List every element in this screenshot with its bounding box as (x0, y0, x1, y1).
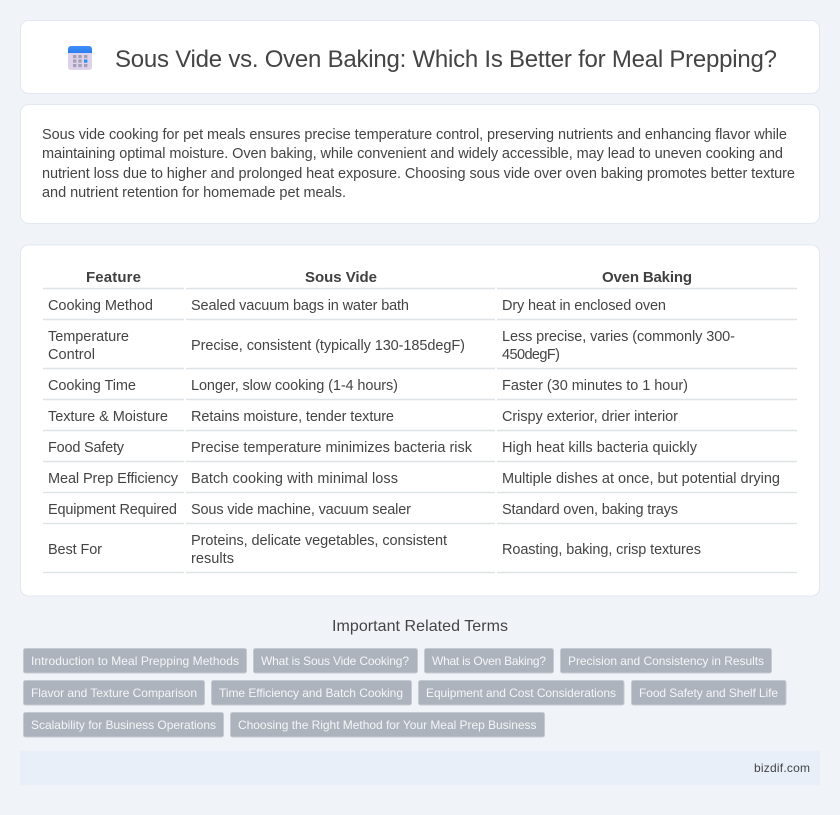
row: texture and moisture: Texture & Moisture (48, 409, 168, 425)
intro text: maintaining optimal moisture. Oven baking, while convenient and widely accessible, may lead to uneven cooking and (42, 146, 783, 162)
table header (86, 269, 692, 286)
intro text: nutrient loss due to higher and prolonged heat exposure. Choosing sous vide over oven baking promotes better texture (42, 166, 795, 182)
tag (24, 712, 224, 737)
row: temperature control (48, 329, 735, 363)
title: Sous Vide vs. Oven Baking: Which Is Better for Meal Prepping? (115, 46, 777, 73)
row: texture and moisture: Crispy exterior, drier interior (502, 409, 678, 425)
tag: What is Sous Vide Cooking? (261, 654, 409, 668)
row: cooking time: Cooking Time (48, 378, 136, 394)
row: food safety: Precise temperature minimizes bacteria risk (191, 440, 473, 456)
row: equipment required: Equipment Required (48, 502, 177, 518)
row: food safety: Food Safety (48, 440, 125, 456)
tag (24, 648, 246, 673)
tag: Precision and Consistency in Results (568, 654, 764, 668)
row: cooking method: Dry heat in enclosed oven (502, 298, 666, 314)
row: best for: Roasting, baking, crisp textures (502, 542, 701, 558)
row: temperature control: 450degF) (502, 347, 560, 363)
row: cooking time: Longer, slow cooking (1-4 hours) (191, 378, 398, 394)
tag (424, 648, 554, 673)
row: temperature control: Control (48, 347, 95, 363)
tag (230, 712, 544, 737)
row: cooking method (48, 298, 666, 314)
tag: Choosing the Right Method for Your Meal Prep Business (238, 718, 536, 732)
table header: Oven Baking (602, 269, 692, 286)
tag: Introduction to Meal Prepping Methods (31, 654, 239, 668)
tag: What is Oven Baking? (432, 654, 546, 668)
tag (212, 680, 412, 705)
row: meal prep efficiency (48, 471, 780, 487)
tag (560, 648, 772, 673)
row: best for: Proteins, delicate vegetables, consistent (191, 533, 447, 549)
row: equipment required: Sous vide machine, vacuum sealer (191, 502, 411, 518)
icon: calendar (68, 46, 92, 70)
table header: Sous Vide (305, 269, 377, 286)
row: texture and moisture: Retains moisture, tender texture (191, 409, 394, 425)
panel: comparison table (20, 245, 820, 596)
tag (418, 680, 624, 705)
row: cooking method: Cooking Method (48, 298, 153, 314)
tag (24, 680, 204, 705)
heading: important related terms: Important Related Terms (332, 618, 508, 635)
intro text (42, 127, 795, 201)
row: best for (48, 533, 701, 567)
tag: Equipment and Cost Considerations (426, 686, 616, 700)
tag (254, 648, 418, 673)
row: temperature control: Temperature (48, 329, 129, 345)
tag: Time Efficiency and Batch Cooking (219, 686, 403, 700)
row: food safety: High heat kills bacteria quickly (502, 440, 698, 456)
footer source: bizdif.com (754, 761, 810, 775)
row: best for: Best For (48, 542, 102, 558)
footer bar (20, 751, 820, 785)
tag: Flavor and Texture Comparison (31, 686, 197, 700)
row: meal prep efficiency: Batch cooking with minimal loss (191, 471, 398, 487)
table header: Feature (86, 269, 141, 286)
row: temperature control: Precise, consistent (typically 130-185degF) (191, 338, 465, 354)
tag (632, 680, 786, 705)
row: best for: results (191, 551, 234, 567)
intro text: Sous vide cooking for pet meals ensures precise temperature control, preserving nutrients and enhancing flavor while (42, 127, 787, 143)
row: equipment required (48, 502, 678, 518)
row: cooking method: Sealed vacuum bags in water bath (191, 298, 409, 314)
row: equipment required: Standard oven, baking trays (502, 502, 678, 518)
tag: Scalability for Business Operations (31, 718, 216, 732)
tag: Food Safety and Shelf Life (639, 686, 778, 700)
row: meal prep efficiency: Multiple dishes at once, but potential drying (502, 471, 780, 487)
panel: title header (20, 20, 820, 94)
tag list (24, 648, 786, 737)
intro text: and nutrient retention for homemade pet meals. (42, 185, 346, 201)
row: meal prep efficiency: Meal Prep Efficiency (48, 471, 179, 487)
row: texture and moisture (48, 409, 678, 425)
panel: intro paragraph (20, 104, 820, 224)
row: cooking time (48, 378, 688, 394)
row: temperature control: Less precise, varies (commonly 300- (502, 329, 735, 345)
row: cooking time: Faster (30 minutes to 1 hour) (502, 378, 688, 394)
row: food safety (48, 440, 698, 456)
